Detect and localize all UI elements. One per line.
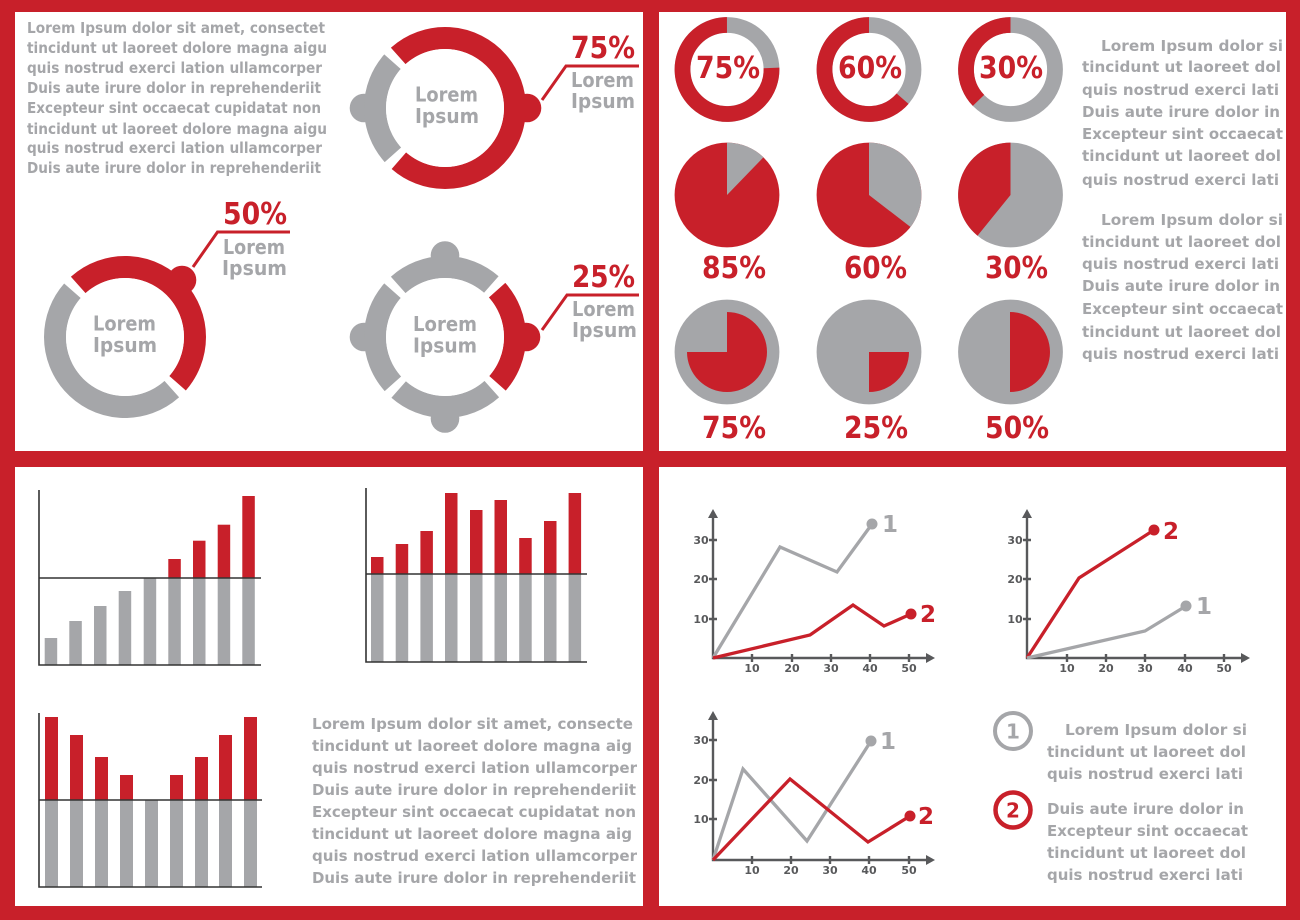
- line chart: top right: 20: [1098, 662, 1114, 675]
- text block: bottom left paragraph: tincidunt ut laoreet dolore magna aig: [312, 737, 632, 755]
- text block: right paragraph one: tincidunt ut laoreet dol: [1082, 58, 1281, 76]
- bar chart: top right: [366, 488, 587, 662]
- text block: right paragraph two: Lorem Ipsum dolor si: [1101, 211, 1283, 229]
- line chart: top left: 1: [882, 512, 898, 538]
- text block: right paragraph two: [1082, 211, 1283, 363]
- line chart: top right: 40: [1177, 662, 1193, 675]
- line chart: bottom left: 30: [822, 864, 838, 877]
- line chart: top left: 20: [693, 573, 709, 586]
- line chart: top left: 10: [693, 613, 709, 626]
- line chart: top left: [693, 509, 936, 675]
- line chart: top left: 20: [784, 662, 800, 675]
- ring chart: 75%: 75%: [571, 31, 635, 66]
- inset pie: 75%: 75%: [702, 411, 766, 446]
- pie: 85%: 85%: [702, 251, 766, 286]
- text block: bottom left paragraph: quis nostrud exerci lation ullamcorper: [312, 759, 638, 777]
- ring chart: 75%: Lorem: [415, 82, 478, 106]
- inset pie: 50%: 50%: [985, 411, 1049, 446]
- text block: top left paragraph: Lorem Ipsum dolor sit amet, consectet: [27, 19, 325, 37]
- pie: 30%: 30%: [985, 251, 1048, 286]
- ring chart: 25%: 25%: [572, 260, 635, 295]
- legend item 2: tincidunt ut laoreet dol: [1047, 844, 1246, 862]
- legend item 2: quis nostrud exerci lati: [1047, 866, 1243, 884]
- line chart: bottom left: 20: [693, 774, 709, 787]
- ring chart: 75%: Lorem: [571, 68, 634, 92]
- text block: top left paragraph: Duis aute irure dolor in reprehenderiit: [27, 79, 321, 97]
- pie: 60%: 60%: [844, 251, 907, 286]
- ring chart: 50%: Ipsum: [222, 256, 287, 280]
- ring chart: 75%: [346, 9, 639, 207]
- text block: top left paragraph: quis nostrud exerci lation ullamcorper: [27, 139, 323, 157]
- panel: percentage pies: [659, 7, 1286, 451]
- panel: donut callouts: [15, 9, 643, 451]
- text block: right paragraph two: quis nostrud exerci lati: [1082, 345, 1279, 363]
- legend item 1: quis nostrud exerci lati: [1047, 765, 1243, 783]
- line chart: bottom left: 1: [880, 729, 896, 755]
- line chart: top right: 2: [1163, 519, 1179, 545]
- text block: top left paragraph: Duis aute irure dolor in reprehenderiit: [27, 159, 321, 177]
- text block: right paragraph two: quis nostrud exerci lati: [1082, 255, 1279, 273]
- inset pie: 25%: 25%: [844, 411, 908, 446]
- ring chart: 50%: Ipsum: [93, 333, 157, 357]
- line chart: top right: 30: [1007, 534, 1023, 547]
- inset pie: 75%: [675, 300, 779, 446]
- ring chart: 50%: Lorem: [223, 235, 285, 259]
- legend item 1: 1: [1006, 720, 1020, 744]
- ring chart: 75%: Ipsum: [415, 104, 479, 128]
- text block: bottom left paragraph: Lorem Ipsum dolor sit amet, consecte: [312, 715, 633, 733]
- text block: right paragraph one: quis nostrud exerci lati: [1082, 171, 1279, 189]
- text block: bottom left paragraph: tincidunt ut laoreet dolore magna aig: [312, 825, 632, 843]
- ring chart: 25%: Ipsum: [413, 334, 477, 358]
- text block: bottom left paragraph: Excepteur sint occaecat cupidatat non: [312, 803, 636, 821]
- line chart: bottom left: 10: [693, 813, 709, 826]
- line chart: bottom left: 20: [783, 864, 799, 877]
- line chart: top right: 20: [1007, 573, 1023, 586]
- ring chart: 75%: Ipsum: [571, 89, 635, 113]
- text block: right paragraph two: Duis aute irure dolor in: [1082, 277, 1280, 295]
- text block: right paragraph two: Excepteur sint occaecat: [1082, 300, 1283, 318]
- legend item 1: tincidunt ut laoreet dol: [1047, 743, 1246, 761]
- text block: right paragraph one: Duis aute irure dolor in: [1082, 103, 1280, 121]
- ring chart: 25%: Ipsum: [572, 318, 637, 342]
- text block: bottom left paragraph: quis nostrud exerci lation ullamcorper: [312, 847, 638, 865]
- text block: top left paragraph: quis nostrud exerci lation ullamcorper: [27, 59, 323, 77]
- line chart: top right: 10: [1059, 662, 1075, 675]
- pie: 60%: [817, 143, 921, 286]
- text block: right paragraph one: Lorem Ipsum dolor si: [1101, 37, 1283, 55]
- ring chart: 50%: Lorem: [93, 312, 156, 336]
- line chart: top left: 50: [901, 662, 917, 675]
- text block: bottom left paragraph: Duis aute irure dolor in reprehenderiit: [312, 869, 636, 887]
- text block: right paragraph one: tincidunt ut laoreet dol: [1082, 147, 1281, 165]
- line chart: bottom left: [693, 711, 935, 877]
- text block: top left paragraph: [27, 19, 327, 177]
- line chart: top left: 2: [920, 602, 936, 628]
- ring chart: 25%: [346, 238, 639, 436]
- text block: right paragraph two: tincidunt ut laoreet dol: [1082, 233, 1281, 251]
- ring chart: 25%: Lorem: [413, 312, 477, 336]
- text block: bottom left paragraph: Duis aute irure dolor in reprehenderiit: [312, 781, 636, 799]
- inset pie: 50%: [958, 300, 1063, 446]
- text block: right paragraph one: [1082, 37, 1283, 189]
- text block: top left paragraph: Excepteur sint occaecat cupidatat non: [27, 99, 321, 117]
- line chart: bottom left: 40: [861, 864, 877, 877]
- text block: right paragraph one: quis nostrud exerci lati: [1082, 81, 1279, 99]
- inset pie: 25%: [817, 300, 921, 446]
- text block: top left paragraph: tincidunt ut laoreet dolore magna aigu: [27, 120, 327, 138]
- bar chart: valley bars: [39, 713, 262, 887]
- text block: bottom left paragraph: [312, 715, 638, 887]
- text block: top left paragraph: tincidunt ut laoreet dolore magna aigu: [27, 39, 327, 57]
- line chart: bottom left: 2: [918, 804, 934, 830]
- legend item 1: Lorem Ipsum dolor si: [1065, 721, 1247, 739]
- legend item 1: [995, 713, 1247, 783]
- panel: line charts: [659, 467, 1286, 906]
- text block: right paragraph one: Excepteur sint occaecat: [1082, 125, 1283, 143]
- line chart: top right: 50: [1216, 662, 1232, 675]
- ring chart: 50%: [26, 197, 290, 436]
- line chart: top right: 10: [1007, 613, 1023, 626]
- text block: right paragraph two: tincidunt ut laoreet dol: [1082, 323, 1281, 341]
- ring chart: 50%: 50%: [223, 197, 287, 232]
- line chart: bottom left: 30: [693, 734, 709, 747]
- donut: 75%: [681, 23, 773, 116]
- legend item 2: [996, 792, 1248, 884]
- line chart: top right: 30: [1137, 662, 1153, 675]
- donut: 60%: [806, 7, 932, 132]
- line chart: top left: 10: [744, 662, 760, 675]
- donut: 75%: 75%: [696, 51, 760, 86]
- legend item 2: Duis aute irure dolor in: [1047, 800, 1244, 818]
- donut: 30%: [948, 7, 1073, 132]
- line chart: bottom left: 10: [744, 864, 760, 877]
- pie: 85%: [675, 143, 779, 286]
- line chart: top left: 40: [862, 662, 878, 675]
- line chart: bottom left: 50: [901, 864, 917, 877]
- ring chart: 25%: Lorem: [572, 297, 635, 321]
- line chart: top left: 30: [823, 662, 839, 675]
- panel: bar charts: [15, 467, 643, 906]
- donut: 60%: 60%: [838, 51, 902, 86]
- line chart: top right: [1007, 509, 1250, 675]
- legend item 2: 2: [1006, 798, 1020, 822]
- line chart: top left: 30: [693, 534, 709, 547]
- bar chart: rising bars: [39, 490, 261, 665]
- line chart: top right: 1: [1196, 594, 1212, 620]
- legend item 2: Excepteur sint occaecat: [1047, 822, 1248, 840]
- pie: 30%: [958, 143, 1063, 286]
- donut: 30%: 30%: [979, 51, 1043, 86]
